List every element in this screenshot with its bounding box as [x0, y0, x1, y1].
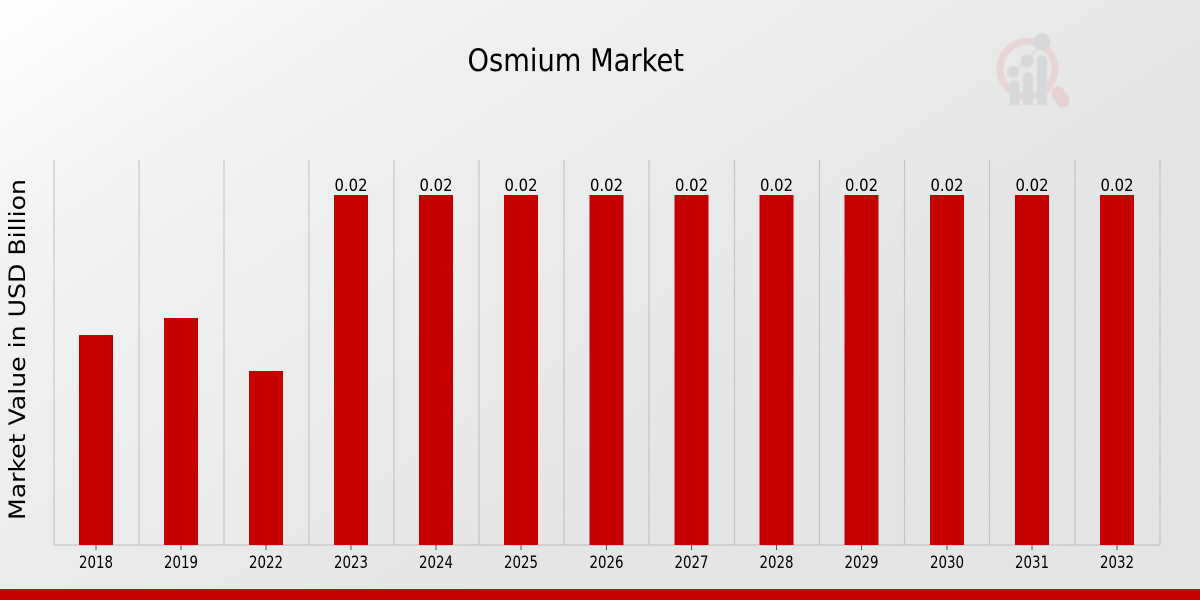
value labels: 0.02 — [930, 176, 964, 196]
x axis ticks — [96, 545, 1117, 550]
x axis labels: 2023 — [334, 553, 368, 573]
value labels — [334, 176, 1134, 196]
value labels: 0.02 — [1016, 176, 1048, 196]
icon: watermark logo magnifier with bar chart — [1000, 34, 1063, 105]
value labels: 0.02 — [334, 176, 368, 196]
x axis labels: 2027 — [674, 553, 708, 573]
x axis labels: 2030 — [930, 553, 964, 573]
x axis labels: 2029 — [844, 553, 878, 573]
x axis labels: 2025 — [504, 553, 538, 573]
value labels: 0.02 — [590, 176, 623, 196]
value labels: 0.02 — [1100, 176, 1134, 196]
x axis labels: 2032 — [1100, 553, 1134, 573]
x axis labels: 2022 — [249, 553, 283, 573]
x axis labels: 2026 — [590, 553, 624, 573]
x axis labels: 2019 — [164, 553, 198, 573]
x axis labels: 2028 — [760, 553, 794, 573]
x axis labels — [79, 553, 1134, 573]
value labels: 0.02 — [675, 176, 708, 196]
value labels: 0.02 — [504, 176, 538, 196]
value labels: 0.02 — [420, 176, 452, 196]
value labels: 0.02 — [760, 176, 793, 196]
title: Osmium Market — [468, 43, 684, 79]
x axis labels: 2024 — [419, 553, 453, 573]
x axis labels: 2018 — [79, 553, 113, 573]
value labels: 0.02 — [845, 176, 878, 196]
y axis label: Market Value in USD Billion — [6, 179, 31, 520]
bars — [79, 195, 1134, 545]
bar chart — [54, 160, 1160, 573]
x axis labels: 2031 — [1015, 553, 1049, 573]
footer bar — [0, 589, 1200, 600]
